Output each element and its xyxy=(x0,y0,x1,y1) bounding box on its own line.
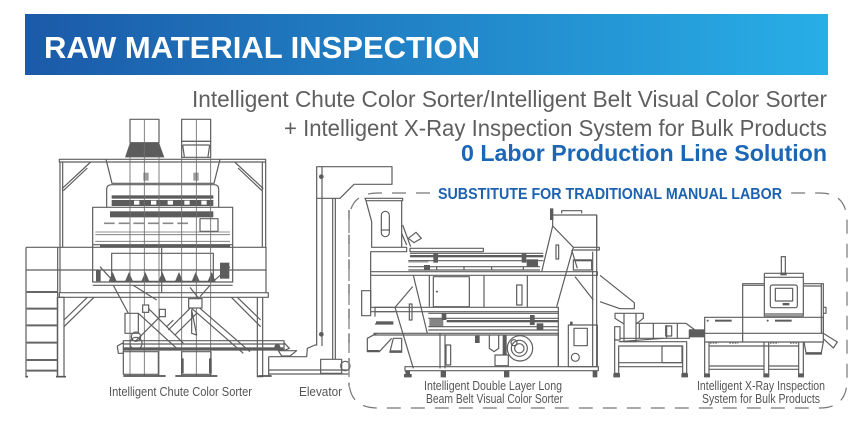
label: double layer belt visual color sorter: Beam Belt Visual Color Sorter xyxy=(426,392,563,406)
label: double layer belt visual color sorter xyxy=(424,379,563,406)
left feed hopper xyxy=(365,198,421,272)
right hopper and cover xyxy=(542,208,599,307)
left inclined cover and outlet xyxy=(367,275,427,368)
upper belt xyxy=(408,248,543,270)
title banner xyxy=(25,14,828,75)
dashed box heading: SUBSTITUTE FOR TRADITIONAL MANUAL LABOR xyxy=(438,186,782,203)
collection hoppers and cross pipes xyxy=(113,285,250,353)
subtitle text block: Intelligent Chute Color Sorter/Intelligent Belt Visual Color Sorter xyxy=(192,86,827,112)
label: double layer belt visual color sorter: Intelligent Double Layer Long xyxy=(424,379,562,393)
reject bin and outlet chute xyxy=(804,333,837,355)
machine: intelligent x-ray inspection system xyxy=(704,257,837,377)
dashed boundary: substitute for manual labor xyxy=(349,186,847,408)
label: x-ray inspection system: Intelligent X-Ray Inspection xyxy=(697,379,825,393)
stairs xyxy=(27,292,57,371)
sorter chutes xyxy=(93,245,233,285)
beacon xyxy=(780,257,787,275)
machine: vibratory conveyor link xyxy=(600,275,705,377)
label: x-ray inspection system xyxy=(697,379,825,406)
base rail and feet xyxy=(404,367,598,377)
platform and railing xyxy=(26,247,268,377)
subtitle text block: + Intelligent X-Ray Inspection System for Bulk Products xyxy=(284,115,827,141)
label: elevator: Elevator xyxy=(299,385,342,399)
x-ray cabinet xyxy=(743,273,823,333)
label: intelligent chute color sorter: Intelligent Chute Color Sorter xyxy=(109,385,252,399)
funnel and upper sorter body xyxy=(93,159,233,247)
lower belt xyxy=(428,313,558,330)
top feed hoppers xyxy=(125,119,211,157)
blower and control box xyxy=(440,322,597,368)
machine: double layer long beam belt visual color sorter xyxy=(362,198,599,377)
support frame xyxy=(59,159,266,247)
title: RAW MATERIAL INSPECTION xyxy=(44,30,480,65)
legs and base xyxy=(704,342,804,377)
main frame beams xyxy=(362,215,597,367)
subtitle text block xyxy=(192,86,827,166)
conveyor housing xyxy=(705,307,826,343)
bottom conveyor and base xyxy=(25,341,297,377)
label: x-ray inspection system: System for Bulk Products xyxy=(702,392,820,406)
long vertical pipes xyxy=(130,119,211,377)
machine: intelligent chute color sorter xyxy=(25,119,297,377)
subtitle text block: 0 Labor Production Line Solution xyxy=(461,140,827,166)
machine: elevator xyxy=(269,167,392,387)
